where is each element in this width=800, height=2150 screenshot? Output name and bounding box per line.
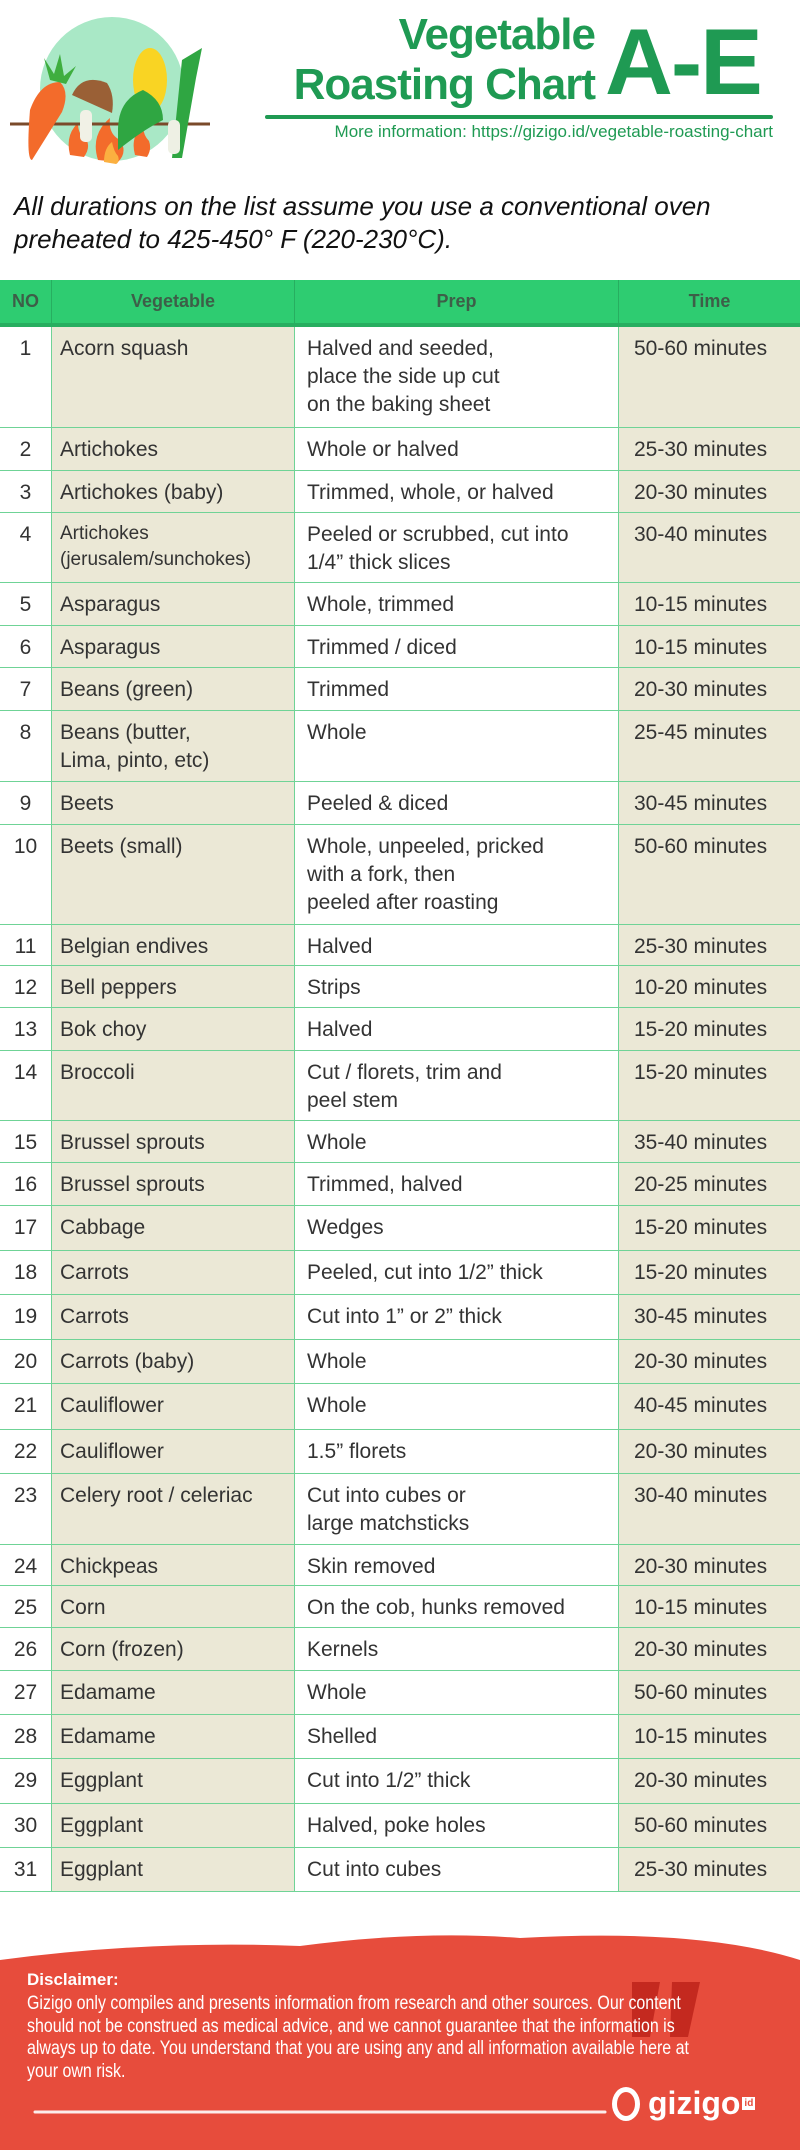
logo: gizigo: gizigo	[648, 2085, 740, 2121]
table: 20	[14, 1350, 37, 1373]
table: 15-20 minutes	[634, 1061, 767, 1084]
table: 29	[14, 1769, 37, 1792]
table: 30	[14, 1814, 37, 1837]
table: Cabbage	[60, 1216, 145, 1239]
table: peeled after roasting	[307, 891, 498, 914]
table: 15	[14, 1131, 37, 1154]
table: Carrots (baby)	[60, 1350, 194, 1373]
table: on the baking sheet	[307, 393, 490, 416]
table: 25-30 minutes	[634, 935, 767, 958]
table: Wedges	[307, 1216, 384, 1239]
title letters A-E: A-E	[605, 9, 761, 114]
table: 9	[20, 792, 31, 815]
table: Whole	[307, 1131, 367, 1154]
table: Bell peppers	[60, 976, 177, 999]
table: Acorn squash	[60, 337, 188, 360]
table: 20-30 minutes	[634, 1440, 767, 1463]
table: Whole	[307, 721, 367, 744]
table: 31	[14, 1858, 37, 1881]
table: 3	[20, 481, 31, 504]
table: 27	[14, 1681, 37, 1704]
table: 20-30 minutes	[634, 481, 767, 504]
table: Bok choy	[60, 1018, 146, 1041]
table	[0, 280, 800, 1892]
table: 10-15 minutes	[634, 1596, 767, 1619]
logo: gizigo	[612, 2085, 755, 2121]
table: 50-60 minutes	[634, 337, 767, 360]
table: 25	[14, 1596, 37, 1619]
table: Peeled or scrubbed, cut into	[307, 523, 568, 546]
table: Halved and seeded,	[307, 337, 494, 360]
table: Celery root / celeriac	[60, 1484, 253, 1507]
table: Whole, trimmed	[307, 593, 454, 616]
table: 35-40 minutes	[634, 1131, 767, 1154]
table: 30-40 minutes	[634, 523, 767, 546]
table: peel stem	[307, 1089, 398, 1112]
table: Trimmed	[307, 678, 389, 701]
table: 19	[14, 1305, 37, 1328]
disclaimer heading: Disclaimer:	[27, 1970, 119, 1989]
table: 25-45 minutes	[634, 721, 767, 744]
title: Vegetable	[399, 10, 595, 59]
table: 30-45 minutes	[634, 792, 767, 815]
table: Eggplant	[60, 1769, 143, 1792]
table: Peeled & diced	[307, 792, 448, 815]
table: 1.5” florets	[307, 1440, 406, 1463]
table: 1/4” thick slices	[307, 551, 451, 574]
table header	[0, 280, 800, 327]
table: 50-60 minutes	[634, 1814, 767, 1837]
table: 12	[14, 976, 37, 999]
table header: Prep	[436, 291, 477, 311]
table: Corn	[60, 1596, 106, 1619]
table: 5	[20, 593, 31, 616]
table: 10	[14, 835, 37, 858]
table: 16	[14, 1173, 37, 1196]
table: (jerusalem/sunchokes)	[60, 549, 251, 570]
table: 10-20 minutes	[634, 976, 767, 999]
table: Halved, poke holes	[307, 1814, 486, 1837]
table: 20-30 minutes	[634, 678, 767, 701]
table: 14	[14, 1061, 37, 1084]
table: 50-60 minutes	[634, 1681, 767, 1704]
table: 11	[15, 935, 36, 958]
icon: skewer vegetables	[10, 122, 210, 126]
table: 7	[20, 678, 31, 701]
table: Edamame	[60, 1725, 156, 1748]
table: Beets	[60, 792, 114, 815]
footer panel: disclaimer	[0, 1935, 800, 2150]
table: Halved	[307, 935, 372, 958]
table: Trimmed / diced	[307, 636, 457, 659]
table: Strips	[307, 976, 361, 999]
table: Beans (butter,	[60, 721, 191, 744]
intro text: All durations on the list assume you use a conventional oven preheated to 425-450° F (220-230°C).	[14, 191, 711, 254]
table: Shelled	[307, 1725, 377, 1748]
table: Artichokes	[60, 523, 149, 544]
table: Cut / florets, trim and	[307, 1061, 502, 1084]
table: Eggplant	[60, 1814, 143, 1837]
table: 17	[14, 1216, 37, 1239]
table: Corn (frozen)	[60, 1638, 184, 1661]
table: 2	[20, 438, 31, 461]
table: Carrots	[60, 1261, 129, 1284]
table: Brussel sprouts	[60, 1131, 205, 1154]
table header: Time	[689, 291, 730, 311]
table header: Vegetable	[131, 291, 215, 311]
table: 28	[14, 1725, 37, 1748]
table: 23	[14, 1484, 37, 1507]
table: Whole or halved	[307, 438, 459, 461]
table: 20-30 minutes	[634, 1350, 767, 1373]
table: Whole	[307, 1394, 367, 1417]
table: Eggplant	[60, 1858, 143, 1881]
table: 15-20 minutes	[634, 1216, 767, 1239]
logo: gizigo: id	[744, 2098, 753, 2109]
table: 15-20 minutes	[634, 1261, 767, 1284]
table: 4	[20, 523, 31, 546]
table: Asparagus	[60, 636, 160, 659]
table: 50-60 minutes	[634, 835, 767, 858]
table: 25-30 minutes	[634, 1858, 767, 1881]
table: Whole, unpeeled, pricked	[307, 835, 544, 858]
table: 21	[14, 1394, 37, 1417]
table: with a fork, then	[307, 863, 455, 886]
table: Cut into 1” or 2” thick	[307, 1305, 502, 1328]
table: Trimmed, halved	[307, 1173, 463, 1196]
table: 1	[20, 337, 31, 360]
table: Trimmed, whole, or halved	[307, 481, 554, 504]
table: Lima, pinto, etc)	[60, 749, 209, 772]
table: 20-30 minutes	[634, 1638, 767, 1661]
table: 10-15 minutes	[634, 636, 767, 659]
table: 20-30 minutes	[634, 1769, 767, 1792]
table: Brussel sprouts	[60, 1173, 205, 1196]
table: Cut into cubes or	[307, 1484, 466, 1507]
table: Cut into 1/2” thick	[307, 1769, 470, 1792]
table: 20-30 minutes	[634, 1555, 767, 1578]
disclaimer text: Gizigo only compiles and presents information from research and other sources. Our content should not be construed as medical advice, and we cannot guarantee that the information is always up to date. You understand that you are using any and all information available here at your own risk.	[27, 1993, 689, 2082]
table: Broccoli	[60, 1061, 135, 1084]
url text: More information: https://gizigo.id/vegetable-roasting-chart	[335, 122, 773, 141]
table: Whole	[307, 1350, 367, 1373]
table: Beans (green)	[60, 678, 193, 701]
table header: NO	[12, 291, 39, 311]
table: Artichokes	[60, 438, 158, 461]
table: Skin removed	[307, 1555, 435, 1578]
table: large matchsticks	[307, 1512, 469, 1535]
icon: flames	[69, 118, 150, 162]
table: 22	[14, 1440, 37, 1463]
table: Cauliflower	[60, 1394, 164, 1417]
table: Carrots	[60, 1305, 129, 1328]
table: Cauliflower	[60, 1440, 164, 1463]
header illustration	[10, 17, 210, 164]
table: 26	[14, 1638, 37, 1661]
table: 40-45 minutes	[634, 1394, 767, 1417]
table: Halved	[307, 1018, 372, 1041]
table: 8	[20, 721, 31, 744]
table: 15-20 minutes	[634, 1018, 767, 1041]
title	[294, 10, 596, 109]
table: 20-25 minutes	[634, 1173, 767, 1196]
table: On the cob, hunks removed	[307, 1596, 565, 1619]
table: 6	[20, 636, 31, 659]
table: Cut into cubes	[307, 1858, 441, 1881]
table: 18	[14, 1261, 37, 1284]
table: Kernels	[307, 1638, 378, 1661]
table: place the side up cut	[307, 365, 500, 388]
table: Peeled, cut into 1/2” thick	[307, 1261, 543, 1284]
table: 10-15 minutes	[634, 1725, 767, 1748]
title: Roasting Chart	[294, 60, 595, 109]
table: Whole	[307, 1681, 367, 1704]
table: 13	[14, 1018, 37, 1041]
table: 25-30 minutes	[634, 438, 767, 461]
table: 10-15 minutes	[634, 593, 767, 616]
table: Belgian endives	[60, 935, 208, 958]
icon: quote marks	[632, 1982, 700, 2037]
table: Beets (small)	[60, 835, 183, 858]
table: 30-45 minutes	[634, 1305, 767, 1328]
table: Artichokes (baby)	[60, 481, 223, 504]
table: 30-40 minutes	[634, 1484, 767, 1507]
table: Edamame	[60, 1681, 156, 1704]
table: Chickpeas	[60, 1555, 158, 1578]
table: 24	[14, 1555, 37, 1578]
table: Asparagus	[60, 593, 160, 616]
